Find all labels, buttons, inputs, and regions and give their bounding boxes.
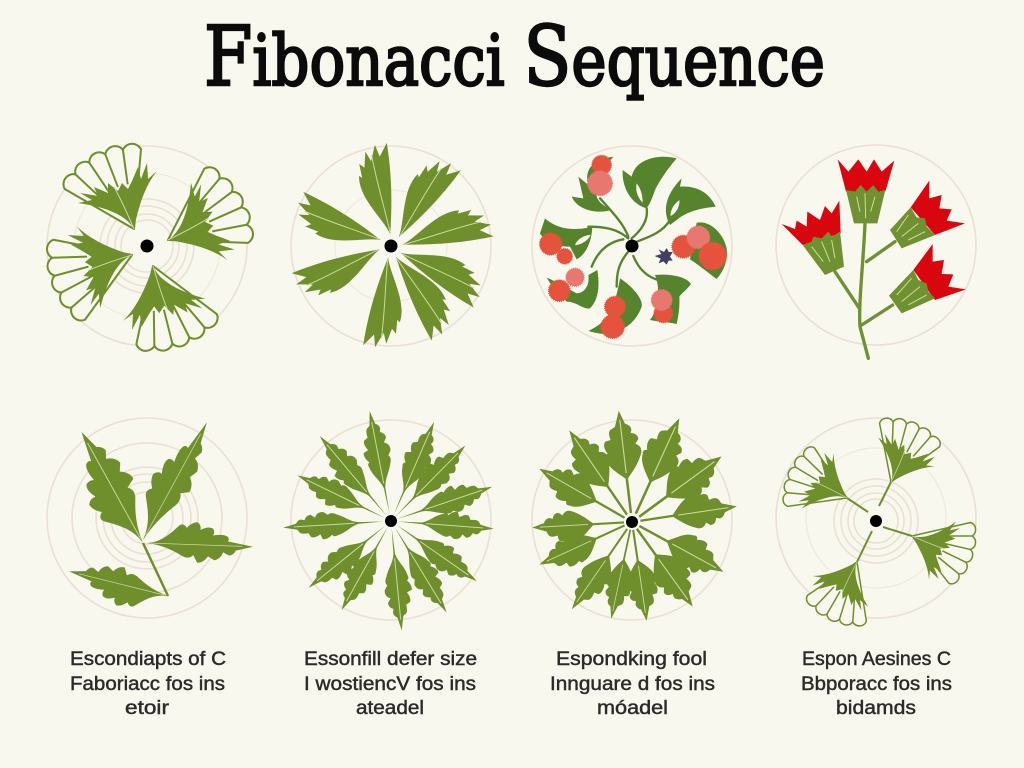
caption 4: Espon Aesines C <box>802 649 951 670</box>
centre dot <box>140 240 154 252</box>
caption 3: móadel <box>597 698 668 719</box>
panel: ginkgo fan spiral, top row 1 <box>40 144 254 359</box>
icon: small navy star <box>655 248 673 265</box>
caption 1: Escondiapts of C <box>70 649 226 670</box>
caption 1: Faboriacc fos ins <box>70 674 225 695</box>
title: Fibonacci Sequence <box>204 10 825 105</box>
caption 3: Espondking fool <box>556 649 707 670</box>
panel: long-stemmed leaf rosette, bottom row 3 <box>531 409 739 623</box>
icon: stems, leaves and berries <box>540 155 727 338</box>
caption 4: Bbporacc fos ins <box>801 674 952 695</box>
caption 2: Essonfill defer size <box>304 649 477 670</box>
caption 1: etoir <box>125 698 170 719</box>
icon: rosette of stemmed leaves <box>531 409 739 623</box>
panel: stemmed fan leaves, bottom row 4 <box>766 400 994 643</box>
centre dot <box>384 240 398 252</box>
panel: red flower stalk, top row 4 <box>776 145 976 358</box>
caption 2: ateadel <box>356 698 424 719</box>
caption 4 <box>801 649 952 719</box>
caption 2: I wostiencV fos ins <box>304 674 476 695</box>
panel: branched leaves, bottom row 1 <box>47 412 254 618</box>
icon: four fan leaves <box>40 144 254 359</box>
centre dot <box>626 240 638 252</box>
centre dot <box>870 515 882 527</box>
caption 4: bidamds <box>836 698 916 719</box>
centre dot <box>626 516 638 528</box>
caption 2 <box>304 649 477 719</box>
icon: rosette of serrated leaves <box>282 409 497 632</box>
panel: feathered leaf spiral, top row 2 <box>288 143 494 353</box>
caption 3 <box>550 649 715 719</box>
caption 3: Innguare d fos ins <box>550 674 715 695</box>
centre dot <box>385 515 397 527</box>
icon: flower stalk with four tulips <box>782 159 966 358</box>
caption 1 <box>70 649 226 719</box>
icon: four serrated leaves on a branch <box>57 412 254 617</box>
icon: four stems and fan leaves <box>766 400 994 643</box>
panel: thirteen leaf rosette, bottom row 2 <box>282 409 497 632</box>
icon: eight feather leaves <box>288 143 494 353</box>
panel: berry and leaf spiral, top row 3 <box>532 146 732 346</box>
